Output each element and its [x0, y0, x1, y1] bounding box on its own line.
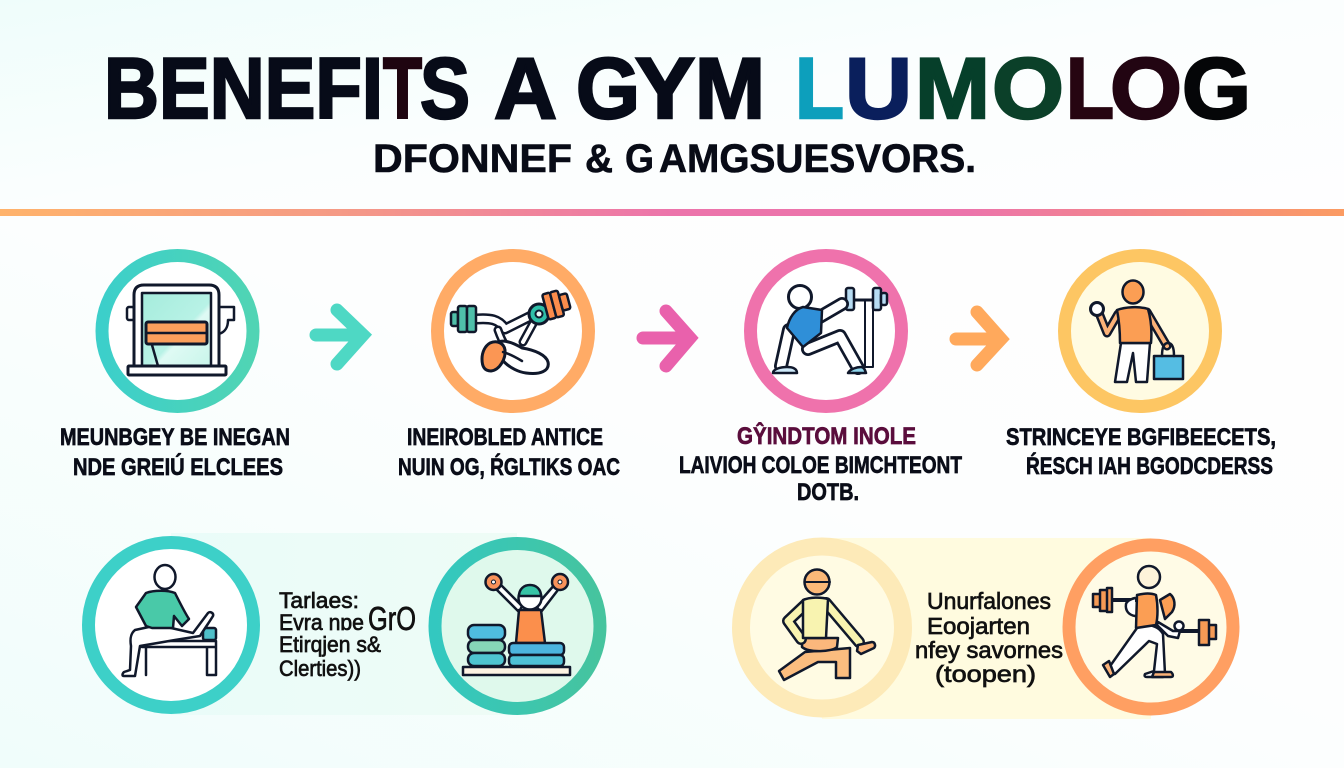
text block: (toopen) [935, 661, 1036, 687]
title: G [1182, 41, 1251, 137]
text block [279, 588, 416, 681]
title: U [845, 41, 912, 137]
title: BENEFI [104, 41, 383, 137]
title: M [915, 41, 990, 137]
title: G [576, 41, 640, 137]
icon: person lifting above stacked mats [463, 574, 570, 675]
ring: orange [438, 256, 588, 406]
subtitle [373, 137, 976, 181]
icon: person lifting dumbbells [451, 288, 572, 374]
ring: yellow [1064, 256, 1216, 406]
label: STRINCEYE BGFIBEECETS, [1006, 424, 1276, 451]
label: ŔESCH IAH BGODCDERSS [1026, 452, 1273, 480]
title: L [795, 41, 844, 137]
title [104, 41, 1251, 137]
icon: person on weight bench [773, 286, 887, 373]
label [60, 424, 290, 481]
title: S [420, 41, 470, 137]
arrow: pink [643, 311, 690, 366]
arrow: orange [956, 312, 1001, 365]
icon: gym machine [127, 285, 234, 375]
title: M [695, 41, 765, 137]
subtitle: DFONNEF [373, 137, 572, 181]
subtitle: & [585, 137, 613, 181]
text block: Eoojarten [927, 613, 1030, 639]
label: INEIROBLED ANTICE [407, 424, 603, 451]
text block: Tarlaes: [279, 588, 359, 613]
text block: Etirqjen s& [279, 632, 381, 657]
icon: person seated on bench [122, 565, 216, 676]
title: A [494, 41, 557, 137]
panel: step 1 [60, 256, 290, 481]
text block: Clerties)) [279, 656, 361, 681]
subtitle: AMGSUESVORS. [659, 137, 976, 181]
title: Y [635, 41, 695, 137]
ring: right orange [1069, 545, 1233, 709]
title: L [1066, 41, 1114, 137]
text block: Unurfalones [927, 588, 1051, 614]
arrow: teal [316, 310, 363, 364]
panel: teal comparison band [88, 533, 600, 715]
panel: step 2 [398, 256, 620, 481]
label: DOTB. [797, 479, 859, 506]
text block: nfey savornes [915, 637, 1063, 663]
panel: step 4 [1006, 256, 1276, 480]
icon: person with barbell [1093, 566, 1216, 677]
ring: pink [750, 256, 902, 406]
subtitle: G [625, 137, 654, 181]
text block [915, 588, 1063, 687]
ring: teal [102, 256, 253, 406]
label: MEUNBGEY BE INEGAN [60, 424, 290, 451]
label [679, 422, 962, 506]
label: LAIVIOH COLOE BIMCHTEONT [679, 452, 962, 479]
text block: Evra nɒe [279, 610, 364, 635]
icon: lunging person [779, 570, 875, 680]
label [398, 424, 620, 481]
panel: step 3 [679, 256, 962, 506]
ring: right teal-green [435, 544, 600, 708]
icon: person with bag [1090, 280, 1183, 382]
title: O [1110, 41, 1182, 137]
title: T [383, 41, 422, 137]
panel: yellow comparison band [741, 538, 1233, 719]
ring: left teal [88, 542, 254, 708]
text block: GrO [368, 600, 416, 637]
label: NDE GREIÚ ELCLEES [73, 453, 283, 481]
label: NUIN OG, ŔGLTIKS OAC [398, 453, 620, 481]
ring: left pale yellow [741, 546, 903, 708]
label [1006, 424, 1276, 480]
title: O [992, 41, 1064, 137]
label: GŶINDTOM INOLE [737, 422, 916, 450]
